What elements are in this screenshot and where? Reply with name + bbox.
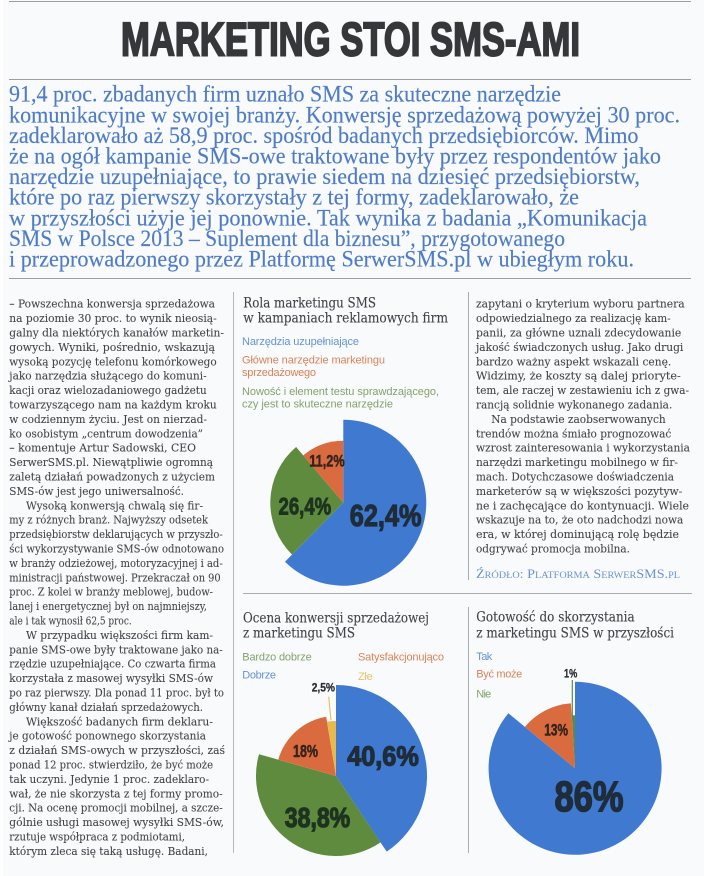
left article column: my z różnych branż. Najwyższy odsetek xyxy=(9,513,209,527)
intro text block: i przeprowadzonego przez Platformę SerwerSMS.pl w ubiegłym roku. xyxy=(9,246,634,272)
left article column: galny dla niektórych kanałów marketin- xyxy=(9,326,224,340)
left article column: je gotowość ponownego skorzystania xyxy=(7,729,206,743)
pie chart: 26,4% xyxy=(278,494,331,521)
legend: Dobrze xyxy=(242,669,276,681)
left article column: Wysoką konwersją chwalą się fir- xyxy=(26,498,203,512)
intro text block: narzędzie uzupełniające, to prawie siedem na dziesięć przedsiębiorstw, xyxy=(9,164,640,190)
right article column: rancją solidnie wykonanego zadania. xyxy=(476,398,672,412)
left article column: którym zleca się taką usługę. Badani, xyxy=(9,844,208,858)
right article column: zapytani o kryterium wyboru partnera xyxy=(476,297,685,311)
legend: Nowość i element testu sprawdzającego, xyxy=(242,386,439,398)
left article column: jako narzędzia służącego do komuni- xyxy=(7,369,207,383)
left article column: ponad 12 proc. stwierdziło, że być może xyxy=(9,758,213,772)
right article column: jakość świadczonych usług. Jako drugi xyxy=(474,340,684,354)
right article column: ne i zachęcające do kontynuacji. Wiele xyxy=(476,498,689,512)
intro text block: że na ogół kampanie SMS-owe traktowane były przez respondentów jako xyxy=(9,144,661,170)
left article column: w branży odzieżowej, motoryzacyjnej i ad- xyxy=(9,556,223,570)
intro text block: w przyszłości użyje jej ponownie. Tak wynika z badania „Komunikacja xyxy=(9,205,648,231)
intro text block: komunikacyjne w swojej branży. Konwersję sprzedażową powyżej 30 proc. xyxy=(9,102,680,128)
legend: Być może xyxy=(476,669,522,681)
pie chart: 11,2% xyxy=(309,452,345,470)
right article column: era, w której dominującą rolę będzie xyxy=(476,527,679,541)
left article column: cji. Na ocenę promocji mobilnej, a szcze- xyxy=(9,801,223,815)
left article column: ministracji państwowej. Przekraczał on 90 xyxy=(9,570,221,584)
right article column: odpowiedzialnego za realizację kam- xyxy=(476,311,671,325)
left article column: lanej i energetycznej był on najmniejszy, xyxy=(9,599,207,613)
pie chart xyxy=(270,420,426,586)
pie chart: 2,5% xyxy=(312,683,335,695)
chart heading: Gotowość do skorzystania xyxy=(476,610,635,626)
right article column: narzędzi marketingu mobilnego w fir- xyxy=(476,455,678,469)
left article column: SMS-ów jest jego uniwersalność. xyxy=(9,484,184,498)
left article column: gowych. Wyniki, pośrednio, wskazują xyxy=(9,340,215,354)
intro text block: które po raz pierwszy skorzystały z tej formy, zadeklarowało, że xyxy=(9,185,579,211)
intro text block: zadeklarowało aż 58,9 proc. spośród badanych przedsiębiorców. Mimo xyxy=(9,123,638,149)
pie chart xyxy=(256,683,427,856)
source note: Źródło: Platforma SerwerSMS.pl xyxy=(476,567,680,581)
legend: Tak xyxy=(476,651,493,663)
left article column: gólnie usługi masowej wysyłki SMS-ów, xyxy=(9,815,224,829)
panel: future readiness xyxy=(476,610,675,855)
left article column: w codziennym życiu. Jest on nierzad- xyxy=(9,412,207,426)
legend xyxy=(242,336,439,410)
right article column: bardzo ważny aspekt wskazali cenę. xyxy=(476,354,671,368)
legend: Złe xyxy=(358,671,373,683)
left article column: ści wykorzystywanie SMS-ów odnotowano xyxy=(9,542,224,556)
chart heading: Ocena konwersji sprzedażowej xyxy=(243,610,429,626)
left article column: z działań SMS-owych w przyszłości, zaś xyxy=(9,743,225,757)
left article column: zaletą działań powadzonych z użyciem xyxy=(9,470,215,484)
left article column: wał, że nie skorzysta z tej formy promo- xyxy=(9,786,223,800)
pie chart: 62,4% xyxy=(350,498,422,533)
legend xyxy=(242,652,444,683)
chart heading xyxy=(243,610,429,641)
intro text block xyxy=(9,82,680,272)
pie chart: 38,8% xyxy=(285,802,350,833)
left article column: wysoką pozycję telefonu komórkowego xyxy=(9,354,217,368)
right article column: mach. Dotychczasowe doświadczenia xyxy=(476,470,674,484)
left article column: główny kanał działań sprzedażowych. xyxy=(9,700,203,714)
right article column: wzrost zainteresowania i wykorzystania xyxy=(476,441,690,455)
left article column: korzystała z masowej wysyłki SMS-ów xyxy=(9,671,213,685)
legend: Nie xyxy=(476,688,491,700)
right article column: odgrywać promocja mobilna. xyxy=(476,542,630,556)
right article column: Na podstawie zaobserwowanych xyxy=(491,412,666,426)
left article column: – Powszechna konwersja sprzedażowa xyxy=(9,297,215,311)
left article column: towarzyszącego nam na każdym kroku xyxy=(9,398,217,412)
chart heading: Rola marketingu SMS xyxy=(243,295,376,311)
left article column: proc. Z kolei w branży meblowej, budow- xyxy=(9,585,213,599)
pie chart: 18% xyxy=(293,741,318,761)
chart heading xyxy=(243,295,448,327)
chart heading: z marketingu SMS xyxy=(243,625,355,641)
right article column xyxy=(474,297,690,556)
left article column: po raz pierwszy. Dla ponad 11 proc. był to xyxy=(9,686,224,700)
left article column: SerwerSMS.pl. Niewątpliwie ogromną xyxy=(9,455,213,469)
left article column: W przypadku większości firm kam- xyxy=(26,628,213,642)
intro text block: 91,4 proc. zbadanych firm uznało SMS za skuteczne narzędzie xyxy=(9,82,561,108)
legend: Narzędzia uzupełniające xyxy=(242,336,359,348)
left article column: tak uczyni. Jedynie 1 proc. zadeklaro- xyxy=(9,772,209,786)
legend: Satysfakcjonująco xyxy=(358,652,444,664)
left article column: rzędzie uzupełniające. Co czwarta firma xyxy=(9,657,216,671)
pie chart: 1% xyxy=(564,668,577,680)
intro text block: SMS w Polsce 2013 – Suplement dla biznesu”, przygotowanego xyxy=(9,226,565,252)
left article column: na poziomie 30 proc. to wynik nieosią- xyxy=(9,311,217,325)
legend: sprzedażowego xyxy=(242,367,316,379)
left article column: przedsiębiorstw deklarujących w przyszło- xyxy=(9,527,223,541)
right article column: panii, za główne uznali zdecydowanie xyxy=(476,326,681,340)
left article column: kacji oraz wielozadaniowego gadżetu xyxy=(9,383,207,397)
chart heading xyxy=(476,610,675,641)
pie chart: 13% xyxy=(544,721,568,739)
left article column: ale i tak wynosił 62,5 proc. xyxy=(9,614,132,628)
chart heading: z marketingu SMS w przyszłości xyxy=(476,625,675,641)
left article column: ko osobistym „centrum dowodzenia” xyxy=(9,426,203,440)
left article column: rzutuje współpraca z podmiotami, xyxy=(9,830,185,844)
right article column: trendów można śmiało prognozować xyxy=(476,426,671,440)
left article column: panie SMS-owe były traktowane jako na- xyxy=(9,642,223,656)
right article column: Widzimy, że koszty są dalej prioryte- xyxy=(476,369,681,383)
legend: Bardzo dobrze xyxy=(242,652,312,664)
panel: role of SMS marketing xyxy=(242,295,448,586)
legend: Główne narzędzie marketingu xyxy=(242,354,385,366)
legend: czy jest to skuteczne narzędzie xyxy=(242,398,393,410)
right article column: marketerów są w większości pozytyw- xyxy=(476,484,682,498)
panel: conversion rating xyxy=(242,610,444,856)
right article column: wskazuje na to, że oto nadchodzi nowa xyxy=(476,513,683,527)
legend xyxy=(476,651,522,700)
pie chart: 40,6% xyxy=(347,740,419,772)
left article column: Większość badanych firm deklaru- xyxy=(26,714,213,728)
left article column xyxy=(7,297,225,858)
left article column: – komentuje Artur Sadowski, CEO xyxy=(9,441,196,455)
pie chart xyxy=(489,668,662,855)
chart heading: w kampaniach reklamowych firm xyxy=(243,311,448,327)
pie chart: 86% xyxy=(554,773,624,821)
